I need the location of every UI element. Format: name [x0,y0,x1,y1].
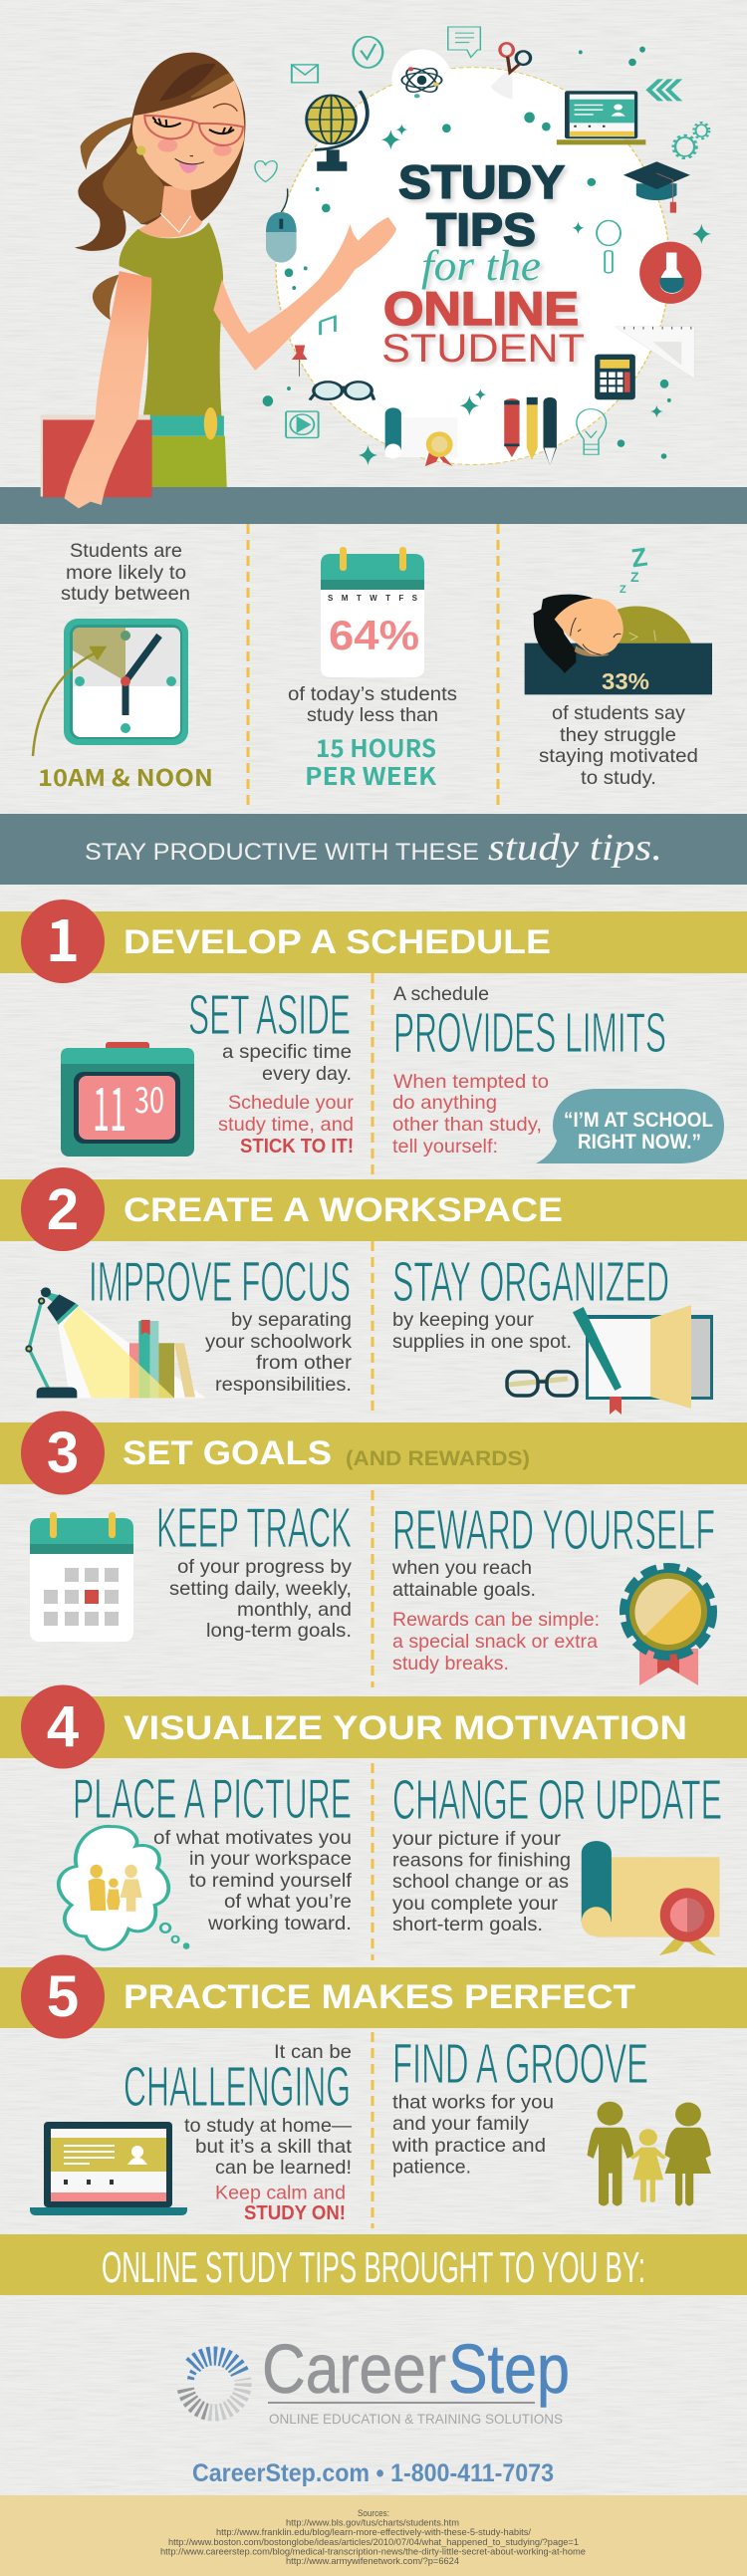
stat 2 text: study less than [307,704,438,726]
tip: place a picture [59,1767,353,1949]
arrow to clock wedge [33,647,105,756]
stat 3 text [539,702,698,789]
heading 5: PRACTICE MAKES PERFECT [124,1978,635,2016]
tip: improve focus [25,1250,353,1398]
number badge 5 [21,1954,105,2038]
tip: provides limits [392,983,724,1163]
CareerStep logo [185,2330,570,2427]
improve focus text [205,1309,353,1396]
sources footer: http://www.careerstep.com/blog/medical-transcription-news/the-dirty-little-secret-about-working-at-home [160,2546,586,2558]
stay organized text: supplies in one spot. [392,1331,572,1353]
tip: keep track [30,1496,352,1642]
stat 1 text: Students are [70,540,182,562]
number badge 2: 2 [47,1177,79,1242]
icon: set square ruler [615,327,694,379]
challenging text: to study at home— [184,2115,353,2137]
challenging red note: Keep calm and [215,2182,346,2203]
icon: heart [255,161,277,182]
keep track text: long-term goals. [206,1620,352,1642]
icon: reading glasses [507,1372,577,1396]
stat 1: study time [33,540,213,793]
icon: check circle [354,37,382,68]
snore letters: Z [629,541,649,573]
icon: globe [307,91,368,171]
stat 1 text: more likely to [66,562,186,584]
logo wordmark: Career [262,2330,446,2408]
sources footer: http://www.boston.com/bostonglobe/ideas/articles/2010/07/04/what_happened_to_studying/?page=1 [168,2537,579,2548]
necklace [160,213,191,232]
hero illustration ring and icons [255,27,711,466]
place a picture heading: PLACE A PICTURE [73,1767,352,1831]
icon: calendar page: 64% [329,612,419,658]
icon: notebook with pen [575,1305,713,1415]
keep track text: of your progress by [177,1556,352,1578]
reward yourself red note: Rewards can be simple: [392,1609,600,1631]
icon: diploma and medal [385,407,457,466]
snore letters [620,541,649,596]
find a groove text: with practice and [391,2135,546,2157]
change or update text: reasons for finishing [392,1849,571,1871]
hair [75,53,245,251]
stat 2 highlight: 15 HOURS [316,729,436,764]
section 3 header [0,1411,747,1494]
logo tagline: ONLINE EDUCATION & TRAINING SOLUTIONS [269,2411,563,2427]
change or update text: your picture if your [392,1828,562,1850]
icon: alarm clock: 11 [93,1062,126,1149]
icon: desk lamp and books [25,1287,206,1398]
icon: speech bubble [448,27,480,57]
sources footer: http://www.franklin.edu/blog/learn-more-effectively-with-these-5-study-habits/ [216,2527,531,2538]
icon: atom [391,49,452,112]
snore letters: Z [630,569,639,585]
hero title [381,155,585,371]
set aside red note [218,1092,355,1158]
face [132,81,244,190]
icon: computer mouse [266,188,297,263]
green dress [120,222,227,488]
set aside red note: STICK TO IT! [240,1136,354,1158]
tip: set aside [61,983,355,1158]
contact line: CareerStep.com • 1-800-411-7073 [192,2459,554,2487]
title: online: ONLINE [383,282,579,335]
number badge 3: 3 [47,1420,79,1485]
banner: stay productive: study tips. [488,827,662,869]
reward yourself red note [392,1609,600,1674]
improve focus text: from other [256,1352,353,1374]
logo sunburst [185,2356,243,2413]
icon: push pin [292,345,308,377]
teal banner under hero [0,487,747,524]
stat 3 text: of students say [552,702,685,724]
icon: play button [286,411,319,437]
find a groove text: patience. [392,2156,471,2178]
set aside red note: study time, and [218,1114,354,1136]
icon: family silhouette [588,2102,711,2206]
icon: laptop [557,91,645,144]
intro text: It can be [274,2041,352,2063]
set aside text [222,1041,352,1085]
title: student: STUDENT [381,327,585,371]
stat 1 highlight: 10AM & NOON [38,759,213,793]
heading 3 sub: (AND REWARDS) [346,1447,530,1470]
find a groove text: and your family [392,2113,529,2135]
icon: thought cloud with family [59,1826,189,1949]
icon: laptop [30,2122,187,2215]
set aside heading: SET ASIDE [188,983,351,1047]
icon: sparkle stars [359,125,711,465]
book and holding arm [41,271,152,508]
icon: music note [321,317,335,335]
improve focus text: your schoolwork [205,1331,352,1353]
number badge 1: 1 [46,895,80,978]
dashed column dividers [248,524,498,805]
icon: medal [623,1567,713,1685]
speech bubble: RIGHT NOW.” [578,1131,701,1154]
icon: calculator [595,355,635,399]
heading 3: SET GOALS [123,1434,332,1472]
keep track heading: KEEP TRACK [156,1496,352,1560]
red book [41,414,152,497]
icon: flask [639,242,701,304]
heading 4: VISUALIZE YOUR MOTIVATION [124,1709,687,1747]
stat 2 text: of today’s students [288,683,457,705]
logo rule [268,2402,535,2404]
tip: change or update [392,1768,722,1955]
place a picture text: working toward. [207,1913,352,1934]
icon: calendar page [321,547,424,677]
find a groove text [391,2092,554,2178]
icon: light bulb [577,409,606,454]
stat 2 text [288,683,457,726]
stat 3 number: 33% [602,668,649,694]
woman dress and pointing arm [93,217,396,488]
challenging text [184,2115,353,2179]
title: study tips [398,155,565,255]
neck [137,186,202,238]
pointing arm and hand [213,217,396,371]
reward yourself text [391,1557,536,1601]
challenging heading: CHALLENGING [124,2055,351,2119]
banner: brought to you by [0,2234,747,2295]
tip: reward yourself [391,1498,715,1685]
heading 2: CREATE A WORKSPACE [124,1191,563,1229]
place a picture text: to remind yourself [189,1870,353,1892]
place a picture text: of what motivates you [153,1827,352,1849]
reward yourself text: attainable goals. [392,1579,536,1601]
stay organized text [392,1309,572,1353]
arm over book [65,271,151,508]
icon: wall calendar [30,1512,133,1642]
place a picture text [153,1827,353,1934]
stat 2 highlight [305,729,437,792]
snore letters: Z [620,584,626,596]
speech bubble [536,1089,724,1163]
number badge 4: 4 [47,1694,79,1759]
banner: stay productive: STAY PRODUCTIVE WITH THESE [85,839,479,866]
reward yourself text: when you reach [391,1557,532,1579]
icon: sleeping student [525,595,712,694]
reward yourself red note: a special snack or extra [392,1631,598,1653]
rear hair lock [93,274,120,320]
red note [392,1071,549,1158]
icon: alarm clock: 30 [134,1072,164,1124]
icon: graduation cap [623,161,690,213]
section 4 header [0,1685,747,1769]
number badge 1 [21,895,105,983]
number badge 4 [21,1685,105,1769]
improve focus heading: IMPROVE FOCUS [89,1250,351,1314]
red note: When tempted to [393,1071,549,1093]
keep track text: setting daily, weekly, [169,1578,352,1600]
tip: stay organized [392,1250,713,1415]
banner: stay productive [0,814,747,885]
icon: alarm clock [61,1042,194,1157]
keep track text: monthly, and [237,1599,352,1621]
icon: chevrons [645,79,682,101]
number badge 5: 5 [47,1964,79,2029]
woman head and hair [75,53,245,251]
sources footer: http://www.armywifenetwork.com/?p=6624 [286,2556,459,2567]
stat 2 highlight: PER WEEK [305,757,437,792]
improve focus text: by separating [231,1309,352,1331]
tip: find a groove [391,2032,711,2206]
white circle backdrop [276,68,669,464]
tip: challenging [30,2041,353,2224]
stat 3 text: staying motivated [539,745,698,767]
red note: tell yourself: [392,1136,498,1158]
challenging red note: STUDY ON! [244,2202,346,2224]
place a picture text: of what you’re [224,1891,352,1913]
section 2 header [0,1167,747,1251]
heading 1: DEVELOP A SCHEDULE [124,923,551,961]
red note: other than study, [392,1114,542,1136]
dashed centre dividers [371,973,374,2228]
change or update text [392,1828,571,1935]
speech bubble: “I’M AT SCHOOL [564,1109,713,1132]
section 1 header [0,895,747,983]
stat 3 text: to study. [581,767,656,789]
icon: magnifier [597,220,621,273]
sources footer [0,2495,747,2576]
set aside red note: Schedule your [228,1092,355,1114]
challenging text: can be learned! [215,2157,352,2179]
place a picture text: in your workspace [189,1848,352,1870]
stat 3: motivation [525,541,712,789]
stat 3 text: they struggle [560,724,676,746]
improve focus text: responsibilities. [215,1374,352,1396]
logo wordmark [262,2330,570,2408]
stat 1 text [61,540,190,605]
set aside text: every day. [262,1063,352,1085]
challenging text: but it’s a skill that [195,2136,353,2158]
keep track text [169,1556,352,1642]
icon: gears [673,123,709,158]
title: study tips: TIPS [426,203,536,255]
icon: pens [504,397,557,465]
stat 2: study hours [288,547,457,792]
number badge 2 [21,1167,105,1251]
section 5 header [0,1954,747,2038]
number badge 3 [21,1411,105,1494]
title: for the: for the [421,243,541,290]
red note: do anything [392,1092,497,1114]
stay organized text: by keeping your [392,1309,535,1331]
icon: calendar page: SMTWTFS [328,594,418,603]
icon: scissors [491,43,531,100]
title: study tips: STUDY [398,155,565,208]
change or update text: school change or as [392,1871,569,1893]
intro text: A schedule [393,983,489,1005]
sources footer: Sources: [358,2508,389,2519]
icon: envelope [292,65,318,83]
find a groove text: that works for you [392,2092,554,2114]
challenging red note [215,2182,346,2224]
logo wordmark: Step [448,2330,570,2408]
sources footer: http://www.bls.gov/tus/charts/students.htm [286,2518,459,2529]
stat 1 text: study between [61,583,190,605]
icon: clock [64,619,188,745]
icon: scroll diploma with seal [582,1841,720,1955]
change or update text: short-term goals. [392,1914,543,1935]
change or update text: you complete your [392,1893,559,1915]
reward yourself red note: study breaks. [392,1653,509,1674]
set aside text: a specific time [222,1041,352,1063]
icon: eyeglasses [310,382,374,400]
icon: teal dots [263,47,671,459]
